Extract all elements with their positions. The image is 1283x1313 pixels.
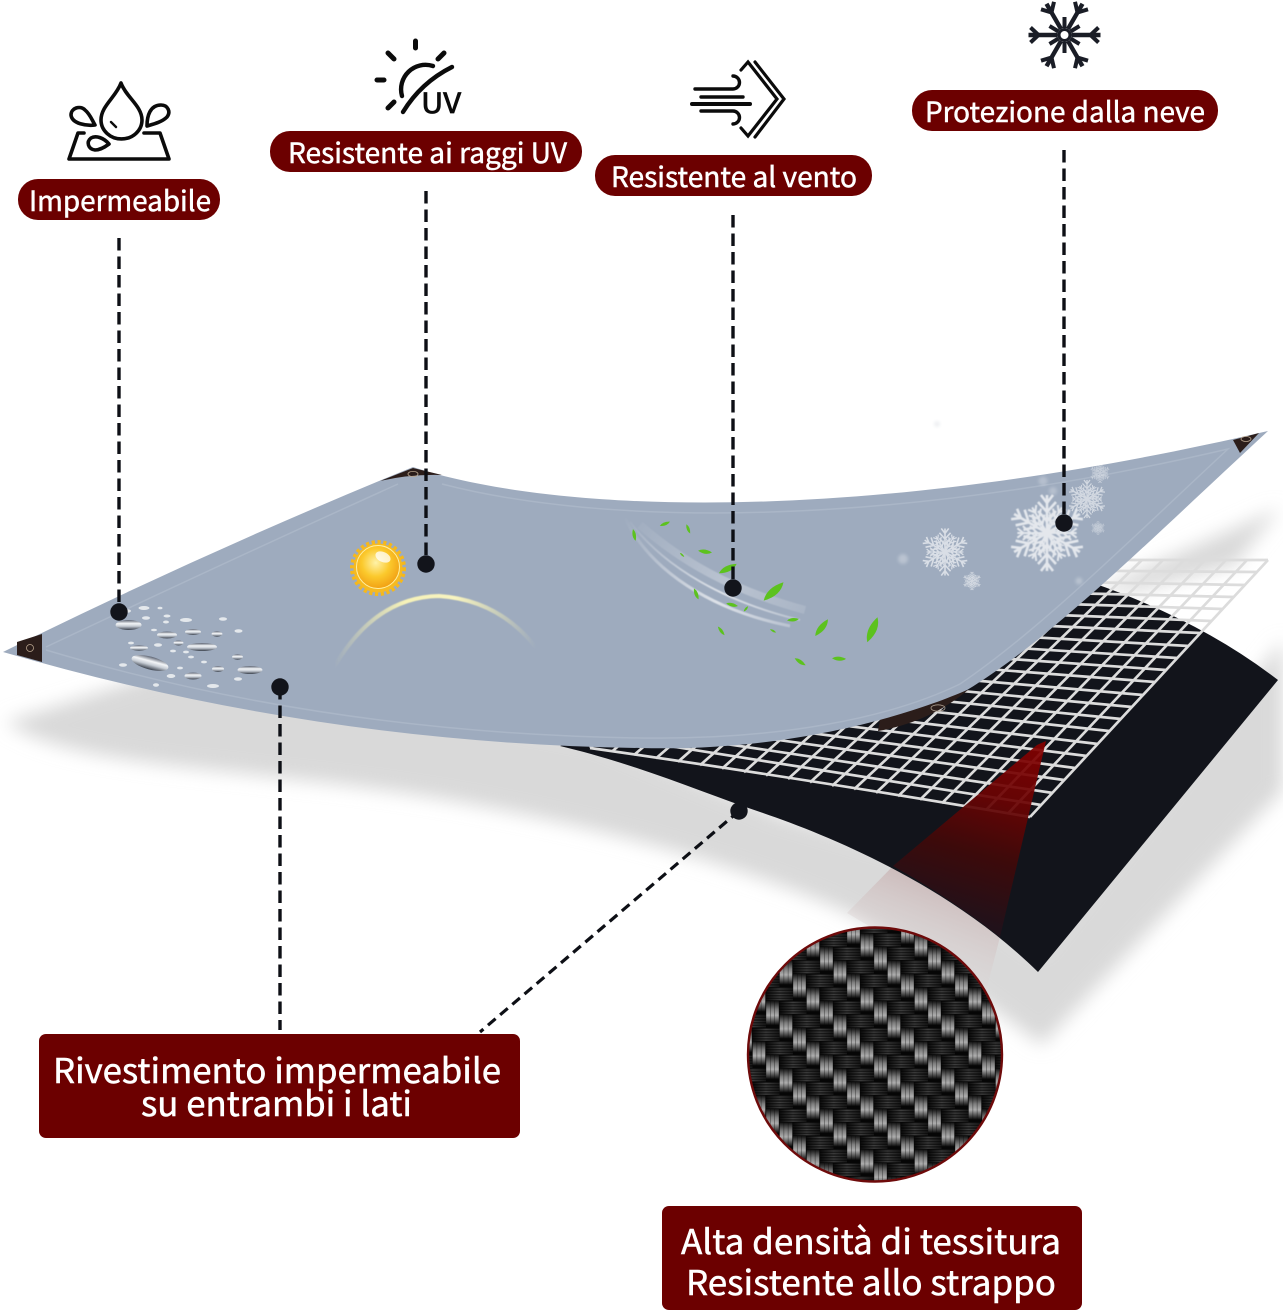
label: Resistente al vento: Resistente al vento xyxy=(611,156,857,196)
callout box: high weave density: Alta densità di tessitura xyxy=(681,1215,1061,1264)
icon: UV sun xyxy=(377,41,462,122)
UV arc xyxy=(334,596,538,667)
callout line: vento xyxy=(724,215,742,597)
callout box: high weave density xyxy=(662,1206,1082,1310)
tarp seam xyxy=(46,449,1228,738)
icon: snowflake xyxy=(1028,0,1100,70)
callout line: coating underside xyxy=(480,802,748,1032)
callout box: double-sided coating: Rivestimento impermeabile xyxy=(53,1044,501,1093)
callout line: raggi UV xyxy=(417,191,435,573)
callout box: double-sided coating: su entrambi i lati xyxy=(141,1077,412,1126)
magnifier light beam on shadow xyxy=(847,866,1000,995)
label: Impermeabile: Impermeabile xyxy=(29,180,211,220)
water droplets xyxy=(116,606,262,688)
grey tarp top surface xyxy=(3,431,1268,748)
green leaves xyxy=(631,520,882,667)
icon: water drop xyxy=(69,83,169,159)
corner patch: left xyxy=(17,634,42,662)
icon: UV sun: UV xyxy=(421,82,462,122)
callout line: coating top side xyxy=(271,678,289,1030)
reinforcement grid xyxy=(590,560,1268,817)
corner patch: bottom xyxy=(878,690,968,731)
wind swoosh xyxy=(625,518,805,626)
black underside layer xyxy=(560,583,1278,972)
sun xyxy=(352,542,404,594)
callout line: impermeabile xyxy=(110,238,128,621)
label: Resistente ai raggi UV: Resistente ai raggi UV xyxy=(288,132,568,172)
corner patch ring: bottom xyxy=(931,705,945,711)
magnified weave circle xyxy=(748,928,1002,1182)
red magnifier cone xyxy=(893,741,1046,937)
corner patch: top xyxy=(380,468,442,481)
snowflakes xyxy=(898,421,1110,590)
drop shadow under the tarp xyxy=(6,508,1283,1045)
callout line: neve xyxy=(1055,150,1073,532)
callout box: double-sided coating xyxy=(39,1034,520,1138)
icon: wind xyxy=(692,62,784,137)
corner patch: right xyxy=(1233,433,1259,453)
callout box: high weave density: Resistente allo strappo xyxy=(686,1256,1056,1305)
label: Protezione dalla neve: Protezione dalla neve xyxy=(925,91,1205,131)
